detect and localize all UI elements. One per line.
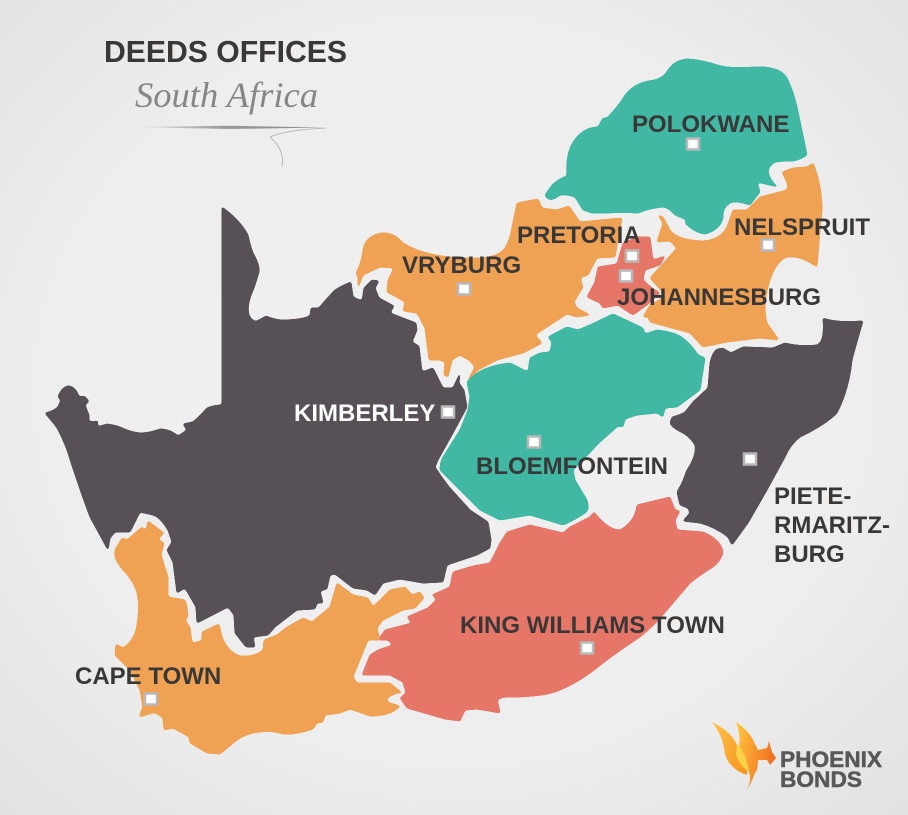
label: Pietermaritzburg: BURG — [774, 541, 845, 568]
map of South Africa — [45, 59, 863, 754]
marker: Pietermaritzburg — [744, 454, 756, 464]
decorative swash under subtitle — [128, 126, 326, 166]
region: King Williams Town — [362, 497, 723, 721]
label: Nelspruit: NELSPRUIT — [734, 214, 870, 241]
region: Bloemfontein — [440, 314, 705, 525]
label: Pretoria: PRETORIA — [517, 222, 641, 249]
label: Pietermaritzburg: PIETE- — [774, 483, 851, 510]
region: Pietermaritzburg — [670, 318, 863, 545]
region: Kimberley — [45, 207, 491, 647]
icon: phoenix — [712, 722, 776, 790]
marker: Polokwane — [687, 138, 699, 150]
region: Gauteng — [587, 237, 665, 315]
region: Polokwane — [545, 59, 807, 234]
marker: Johannesburg — [620, 270, 632, 282]
marker: Vryburg — [458, 284, 470, 294]
title: DEEDS OFFICES — [104, 34, 347, 69]
label: Kimberley: KIMBERLEY — [294, 400, 435, 427]
marker: Kimberley — [442, 406, 454, 418]
marker: Cape Town — [145, 694, 157, 704]
marker: Nelspruit — [762, 240, 774, 250]
marker: King Williams Town — [581, 642, 593, 654]
label: Cape Town: CAPE TOWN — [75, 663, 221, 690]
marker: Pretoria — [626, 250, 638, 262]
wordmark: BONDS — [780, 767, 862, 792]
region: Cape Town — [115, 521, 424, 754]
region: Nelspruit and Johannesburg — [643, 163, 822, 347]
label: Polokwane: POLOKWANE — [632, 111, 789, 138]
label: Bloemfontein: BLOEMFONTEIN — [476, 453, 668, 480]
subtitle: South Africa — [135, 75, 318, 115]
marker: Bloemfontein — [528, 436, 540, 448]
label: Vryburg: VRYBURG — [402, 252, 521, 279]
region: Vryburg and Pretoria — [356, 199, 622, 382]
wordmark: PHOENIX — [780, 747, 882, 772]
label: King Williams Town: KING WILLIAMS TOWN — [460, 612, 725, 639]
logo: Phoenix Bonds — [712, 722, 882, 792]
label: Johannesburg: JOHANNESBURG — [617, 284, 821, 311]
label: Pietermaritzburg: RMARITZ- — [774, 512, 890, 539]
